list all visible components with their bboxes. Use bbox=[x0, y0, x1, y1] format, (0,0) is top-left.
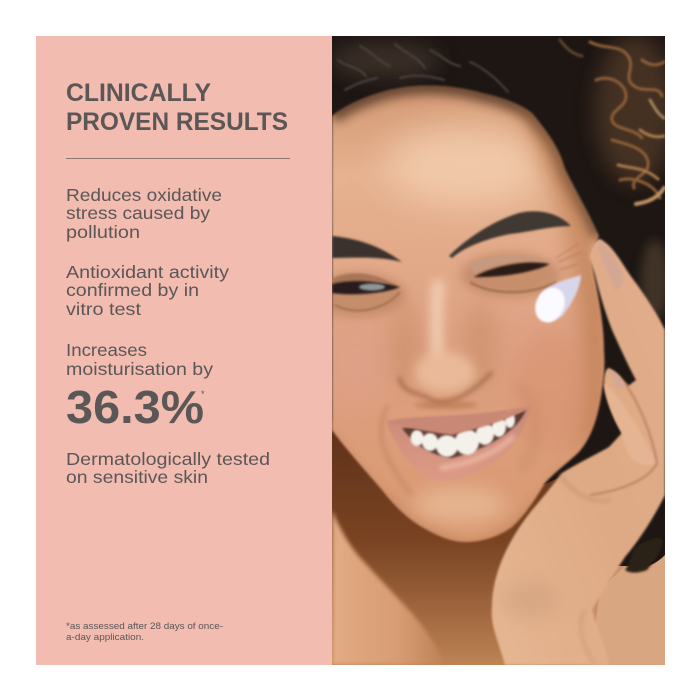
stat: 36.3%: * bbox=[201, 389, 205, 399]
claim: moisturisation: moisturisation by bbox=[66, 359, 213, 379]
claim: antioxidant activity bbox=[66, 262, 229, 319]
footnote: a-day application. bbox=[66, 632, 144, 643]
hair bbox=[330, 35, 675, 566]
right eye bbox=[470, 244, 582, 292]
hair curl bbox=[625, 538, 663, 573]
left eye bbox=[332, 273, 400, 311]
claim: antioxidant activity: confirmed by in bbox=[66, 280, 199, 300]
claim: oxidative stress: stress caused by bbox=[66, 203, 210, 223]
right eyebrow bbox=[449, 211, 571, 258]
mouth bbox=[386, 406, 530, 482]
claim: moisturisation bbox=[66, 340, 213, 379]
claim: oxidative stress: pollution bbox=[66, 222, 140, 242]
nose bbox=[392, 285, 497, 409]
claim: antioxidant activity: Antioxidant activity bbox=[66, 262, 229, 282]
hand and fingers bbox=[492, 239, 665, 665]
shoulder bbox=[332, 510, 445, 665]
title: CLINICALLY bbox=[66, 79, 211, 107]
neck bbox=[332, 420, 575, 665]
claim: dermatologically tested bbox=[66, 449, 270, 487]
stat: 36.3%: 36.3% bbox=[66, 381, 204, 433]
lower skin behind hand bbox=[590, 555, 665, 665]
title bbox=[66, 79, 288, 136]
face bbox=[332, 84, 606, 544]
panel: clinical results bbox=[36, 36, 332, 665]
cream bbox=[530, 275, 581, 327]
claim: oxidative stress bbox=[66, 185, 222, 242]
title: PROVEN RESULTS bbox=[66, 108, 288, 136]
claim: dermatologically tested: on sensitive skin bbox=[66, 467, 208, 487]
left eyebrow bbox=[332, 236, 402, 262]
claim: antioxidant activity: vitro test bbox=[66, 299, 141, 319]
photo: smiling woman applying cream bbox=[310, 35, 675, 665]
smile lines bbox=[381, 405, 412, 495]
footnote: *as assessed after 28 days of once- bbox=[66, 621, 223, 632]
claim: moisturisation: Increases bbox=[66, 340, 147, 360]
claim: oxidative stress: Reduces oxidative bbox=[66, 185, 222, 205]
footnote bbox=[66, 621, 223, 643]
eye socket shadows bbox=[332, 270, 408, 319]
claim: dermatologically tested: Dermatologically tested bbox=[66, 449, 270, 469]
base skin bbox=[520, 566, 630, 665]
teeth bbox=[410, 412, 515, 457]
